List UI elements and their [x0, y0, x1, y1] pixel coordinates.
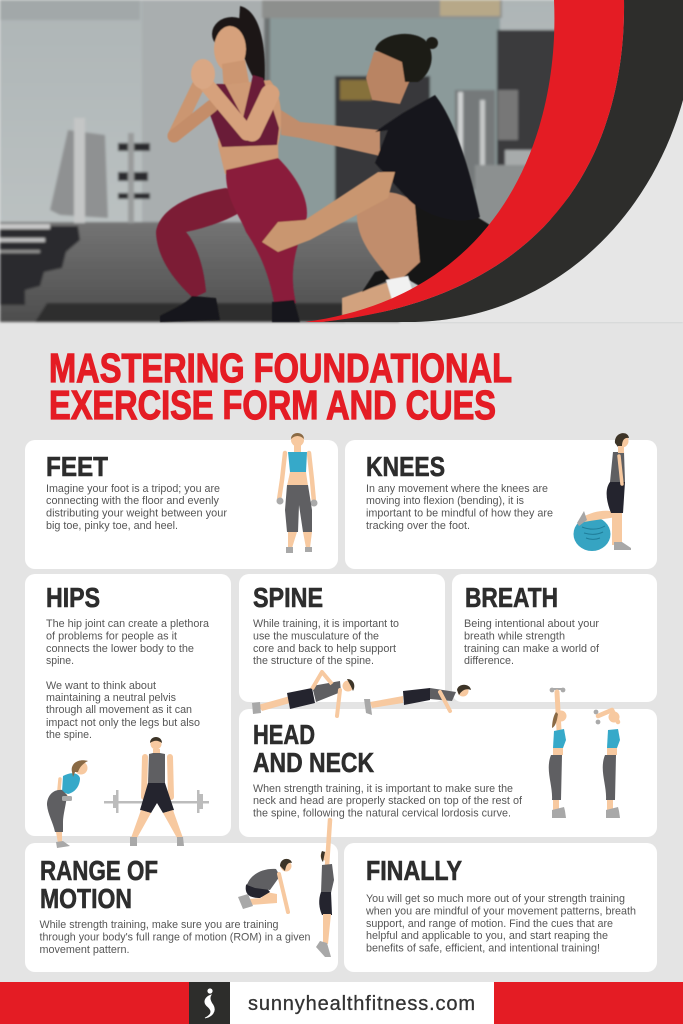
text: spine body: the structure of the spine. — [253, 655, 374, 667]
icon: overhead press figure — [549, 688, 566, 818]
heading: range of motion — [40, 855, 158, 914]
text: hips body: We want to think about — [46, 680, 157, 692]
text: hips body: The hip joint can create a plethora — [46, 618, 210, 630]
icon: woman bent-over row — [47, 760, 88, 848]
panel: knees — [345, 440, 657, 569]
text: breath body — [464, 618, 600, 667]
text: breath body: training can make a world of — [464, 643, 600, 655]
heading: breath: BREATH — [465, 582, 558, 613]
heading: range of motion: MOTION — [40, 883, 132, 914]
text: feet body — [46, 483, 227, 532]
text: feet body: distributing your weight between your — [46, 508, 227, 520]
text: hips body: connects the lower body to the — [46, 643, 194, 655]
panel: feet — [25, 440, 338, 569]
swoosh: red band — [305, 0, 624, 322]
text: range of motion body: through your body's full range of motion (ROM) in a given — [40, 932, 310, 944]
woman — [238, 6, 265, 92]
icon: crouching figure — [238, 859, 292, 912]
heading: hips: HIPS — [46, 582, 100, 613]
title: MASTERING FOUNDATIONAL — [49, 345, 512, 391]
title — [49, 345, 512, 428]
text: finally body: when you are mindful of your movement patterns, breath — [365, 906, 636, 918]
text: hips body: spine. — [46, 655, 74, 667]
title: EXERCISE FORM AND CUES — [49, 382, 496, 428]
heading: feet: FEET — [46, 451, 108, 482]
panel: range of motion — [25, 843, 338, 972]
text: range of motion body: While strength training, make sure you are training — [40, 919, 278, 931]
panel: hips — [25, 574, 231, 836]
heading: knees: KNEES — [366, 451, 445, 482]
text: knees body: In any movement where the knees are — [366, 483, 548, 495]
footer bar — [0, 982, 683, 1024]
text: knees body: tracking over the foot. — [366, 520, 470, 532]
text: spine body: use the musculature of the — [253, 630, 379, 642]
icon: man deadlift with barbell — [104, 737, 209, 846]
text: feet body: Imagine your foot is a tripod; you are — [46, 483, 220, 495]
text: breath body: Being intentional about your — [464, 618, 599, 630]
text: head and neck body: neck and head are properly stacked on top of the rest of — [253, 795, 523, 807]
text: hips body: maintaining a neutral pelvis — [46, 692, 176, 704]
man — [281, 110, 380, 156]
text: breath body: breath while strength — [464, 630, 565, 642]
icon: side plank figure — [252, 672, 354, 716]
panel: head and neck — [239, 709, 657, 837]
text: feet body: big toe, pinky toe, and heel. — [46, 520, 178, 532]
heading: spine: SPINE — [253, 582, 323, 613]
heading: finally: FINALLY — [366, 855, 462, 886]
swoosh: page-colour corner — [415, 100, 683, 322]
swoosh: dark band — [322, 0, 683, 322]
text: range of motion body: movement pattern. — [40, 944, 130, 956]
hero photo: woman squatting with trainer — [0, 0, 683, 322]
heading: head and neck — [253, 719, 374, 778]
text: hips body: impact not only the legs but also — [46, 717, 200, 729]
website url: sunnyhealthfitness.com — [248, 993, 475, 1015]
text: finally body: support, and range of motion. Find the cues that are — [366, 918, 613, 930]
text: breath body: difference. — [464, 655, 514, 667]
text: knees body — [366, 483, 553, 532]
text: spine body — [253, 618, 399, 667]
icon: overhead triceps extension figure — [594, 710, 620, 818]
panel: finally — [344, 843, 657, 972]
logo mark — [189, 982, 230, 1024]
text: range of motion body — [40, 919, 310, 956]
text: spine body: While training, it is important to — [253, 618, 399, 630]
text: hips body: of problems for people as it — [46, 630, 178, 642]
text: finally body: helpful and applicable to you, and start reaping the — [366, 930, 608, 942]
panel: spine — [239, 574, 445, 702]
text: spine body: core and back to help support — [253, 643, 397, 655]
text: head and neck body — [253, 783, 523, 820]
heading: range of motion: RANGE OF — [40, 855, 158, 886]
text: feet body: connecting with the floor and evenly — [46, 495, 219, 507]
text: hips body: through all movement as it can — [46, 704, 192, 716]
icon: man with foot on stability ball — [574, 433, 631, 551]
text: head and neck body: When strength training, it is important to make sure the — [253, 783, 513, 795]
panel: breath — [452, 574, 657, 702]
heading: head and neck: AND NECK — [253, 747, 374, 778]
text: head and neck body: the spine, following the natural cervical lordosis curve. — [253, 808, 511, 820]
text: hips body — [46, 618, 210, 741]
icon: jumping figure — [316, 820, 334, 957]
heading: head and neck: HEAD — [253, 719, 315, 750]
icon: plank figure — [364, 685, 471, 715]
text: finally body: You will get so much more out of your strength training — [366, 893, 625, 905]
text: hips body: the spine. — [46, 729, 92, 741]
icon: standing woman with dumbbells — [276, 433, 318, 553]
text: knees body: important to be mindful of how they are — [366, 508, 553, 520]
text: knees body: moving into flexion (bending), it is — [366, 495, 524, 507]
text: finally body: benefits of safe, efficient, and intentional training! — [366, 942, 600, 954]
text: finally body — [365, 893, 636, 954]
